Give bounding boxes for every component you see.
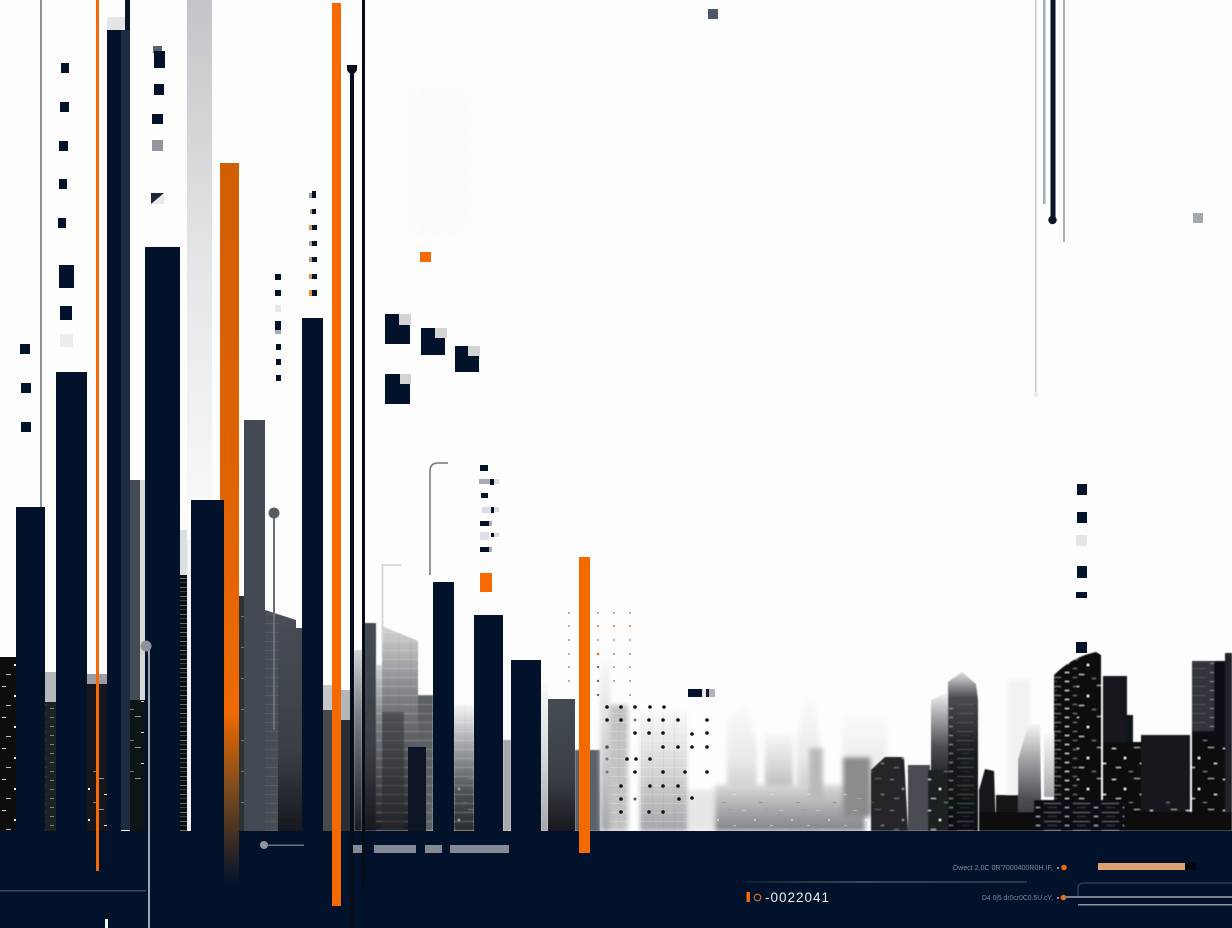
grey bar <box>244 420 265 831</box>
skyline: foggy towers <box>600 660 887 831</box>
thin grey line <box>40 0 42 507</box>
small orange square <box>420 252 431 262</box>
base band: white tick <box>105 919 108 928</box>
base band: segmented grey bars <box>353 845 509 853</box>
copper progress bar <box>1098 863 1196 870</box>
skyline: central district <box>354 623 600 831</box>
pin: pale pole <box>140 640 152 928</box>
black line <box>362 0 365 890</box>
dot matrix: black <box>605 705 709 814</box>
base band: left rule <box>0 890 146 892</box>
base band: slider <box>260 841 304 849</box>
skyline: left district <box>0 480 350 831</box>
dot column: far left <box>20 344 31 432</box>
right small square <box>1193 213 1203 223</box>
dot column: second <box>151 46 165 204</box>
top small square <box>708 9 718 19</box>
orange marker bar <box>579 557 590 853</box>
tall orange bar <box>332 3 341 906</box>
bracket lines <box>382 463 448 640</box>
dot matrix: small grey and orange <box>568 612 631 696</box>
black pin line <box>347 65 357 928</box>
legend row 2: D4 0j5 dr0cr0C0.5U.cY, <box>982 895 1053 902</box>
rounded bracket and rules <box>1064 883 1232 906</box>
navy notched squares <box>385 314 480 404</box>
legend row 1: Dwect 2.0C 0R'7000400R0H.IF, <box>953 865 1053 872</box>
skyline: right district <box>871 652 1232 831</box>
bar chart: left navy bars <box>16 0 224 928</box>
navy base band <box>0 831 1232 928</box>
orange square marker <box>480 573 492 592</box>
thin orange line <box>96 0 99 871</box>
bar chart: central bars <box>408 582 575 831</box>
skyline: foggy base lights <box>610 705 871 830</box>
dot column: right <box>1076 484 1087 653</box>
base band: long rule <box>745 881 1027 883</box>
pale tall column <box>187 0 212 500</box>
dot column: fourth <box>309 191 317 296</box>
dash column: central <box>479 465 499 552</box>
faint ghost grid <box>408 90 468 235</box>
dash marker <box>688 689 715 697</box>
dot column: left <box>58 63 74 347</box>
navy bar <box>302 318 323 928</box>
hanging lines: top right <box>1034 0 1065 398</box>
code readout: -0022041 <box>765 890 829 905</box>
burnt orange bar <box>220 163 239 885</box>
dot column: third <box>275 274 281 381</box>
pin: grey pole <box>268 508 280 730</box>
